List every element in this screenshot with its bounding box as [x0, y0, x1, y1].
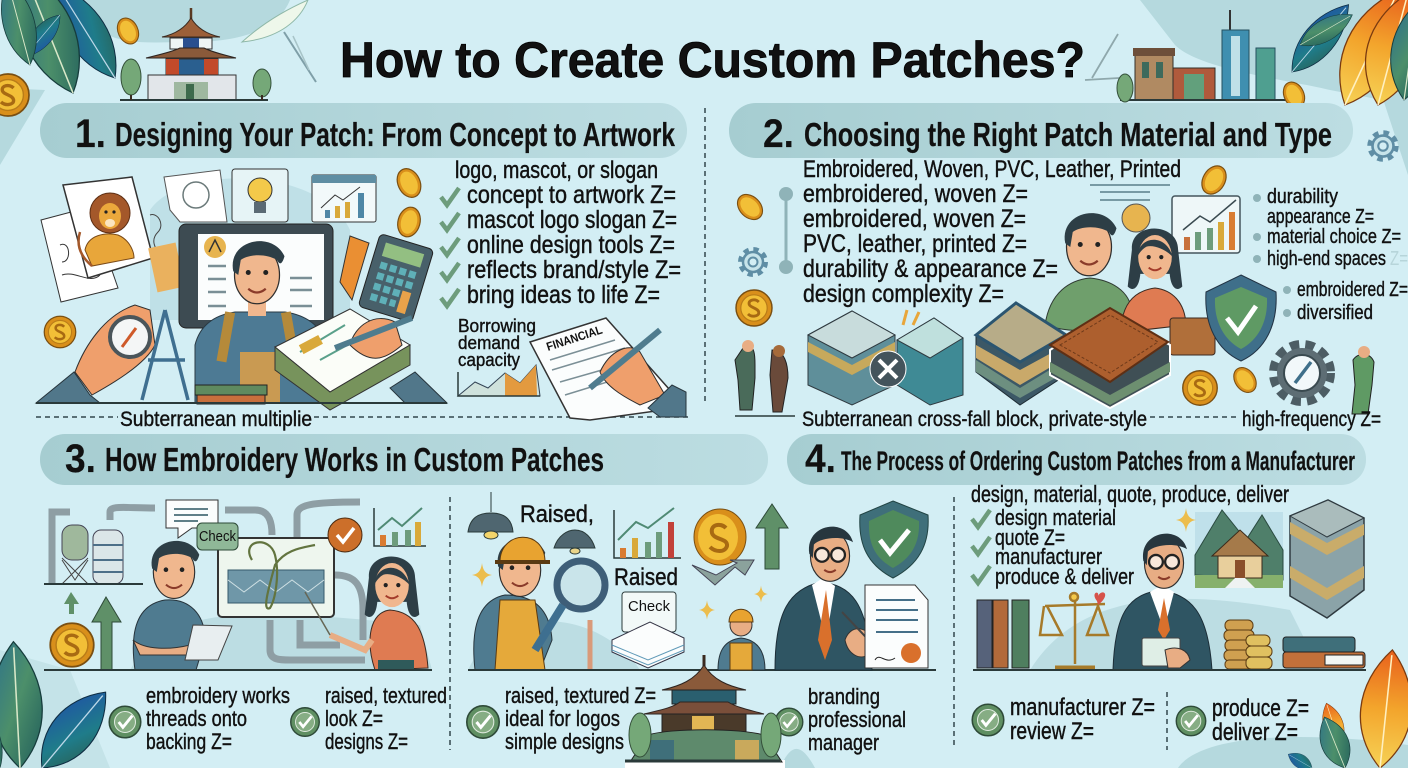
heading pill 4: 4.	[805, 437, 836, 481]
panel 4: captions: deliver Z=	[1212, 719, 1298, 746]
panel 3: captions right: branding	[808, 684, 880, 709]
decorative corner: top-left leaves	[0, 0, 316, 116]
panel 1: financial note	[458, 316, 686, 420]
heading pill 2: 2.	[763, 112, 794, 156]
panel 1: checklist: bring ideas to life Z=	[467, 281, 660, 309]
icon: divider tool	[142, 310, 188, 400]
icon: shield	[1206, 275, 1276, 361]
panel 1: financial note: capacity	[458, 350, 520, 370]
panel 3: captions right	[775, 684, 906, 755]
panel 2: side icons	[730, 133, 1396, 326]
panel 4: checklist: design material	[995, 505, 1116, 530]
panel 2: material list: embroidered, woven Z=	[803, 180, 1028, 208]
person: man with tablet	[133, 541, 232, 670]
heading pill 4	[787, 434, 1366, 485]
panel 3: captions left: look Z=	[325, 706, 383, 731]
panel 4: checklist: produce & deliver	[995, 564, 1134, 589]
icon: green arrows and coin	[50, 592, 121, 670]
panel 2: material list	[779, 156, 1181, 308]
icon: sparkle	[1176, 508, 1196, 532]
panel 2: bottom figures	[735, 340, 1374, 416]
panel 3: captions right: manager	[808, 730, 879, 755]
icon: chart window	[312, 175, 376, 222]
icon: city skyline top right	[1085, 10, 1290, 102]
panel 2: side bullet list: durability	[1267, 186, 1338, 208]
icon: speech bubble	[166, 500, 218, 538]
heading pill 1: Designing Your Patch: From Concept to Artwork	[115, 116, 675, 153]
panel 3: captions middle: raised, textured Z=	[505, 683, 656, 708]
check bubble: Check	[199, 528, 236, 545]
panel 2: footer labels: high-frequency Z=	[1242, 408, 1381, 431]
panel 1: financial note: demand	[458, 333, 520, 353]
icon: books upright	[977, 600, 1029, 668]
panel 1: checklist: online design tools Z=	[467, 231, 675, 259]
icon: lamps	[468, 492, 595, 554]
panel 3: captions left: embroidery works	[146, 683, 290, 708]
panel 3: captions left	[109, 683, 447, 754]
panel 1: footer label: Subterranean multiplie	[120, 408, 312, 431]
icon: column chart	[614, 508, 681, 558]
panel 1: checklist	[441, 157, 681, 309]
panel 3: inspector illustration: Raised	[614, 564, 678, 591]
icon: cross badge	[870, 351, 906, 387]
check bubble	[197, 523, 238, 550]
person: manager	[1113, 534, 1212, 670]
heading pill 1	[40, 103, 687, 158]
panel 2: side bullet list: appearance Z=	[1267, 206, 1374, 228]
icon: hand with compass	[36, 305, 155, 403]
person: woman pointer	[305, 556, 428, 670]
panel 2: material list: embroidered, woven Z=	[803, 205, 1026, 233]
panel 1: checklist: mascot logo slogan Z=	[467, 206, 677, 234]
icon: book stack with hand	[195, 309, 447, 410]
decorative corner: bottom-left leaves	[0, 640, 122, 768]
heading pill 1: 1.	[75, 112, 106, 156]
panel 3: embroidery illustration	[44, 500, 432, 670]
icon: lion drawing	[63, 177, 153, 278]
panel 4: checklist	[971, 481, 1289, 589]
panel 1: checklist: reflects brand/style Z=	[467, 256, 681, 284]
person: small worker	[718, 609, 765, 670]
icon: fabric board	[218, 538, 334, 617]
decorative corner: bottom-right leaves	[1285, 647, 1408, 768]
panel 1: checklist: logo, mascot, or slogan	[455, 157, 658, 184]
heading pill 2	[729, 103, 1353, 158]
panel 3: captions left: designs Z=	[325, 729, 408, 754]
title: How to Create Custom Patches?	[340, 32, 1085, 88]
icon: tanks	[44, 525, 143, 584]
panel 3: captions left: threads onto	[146, 706, 247, 731]
icon: house card	[1195, 510, 1283, 588]
panel 4: manager scene	[973, 534, 1366, 670]
icon: orange tick badge	[328, 518, 362, 552]
panel 3: captions right: professional	[808, 707, 906, 732]
icon: light bulb card	[232, 169, 288, 222]
panel 2: side bullet list: diversified	[1297, 302, 1373, 324]
icon: pagoda top	[120, 8, 271, 100]
decorative corner: top-right leaves	[1279, 0, 1408, 116]
icon: block cube	[1290, 500, 1364, 618]
panel 2: footer labels: Subterranean cross-fall block, private-style	[802, 408, 1147, 431]
icon: tablet with designer	[179, 224, 333, 403]
panel 3: captions left: backing Z=	[146, 729, 232, 754]
check card and papers	[612, 592, 684, 668]
check card and papers: Check	[628, 598, 670, 615]
heading pill 3	[40, 434, 768, 485]
heading pill 3: How Embroidery Works in Custom Patches	[105, 441, 604, 478]
icon: coin stacks	[1224, 620, 1272, 669]
panel 4: captions	[972, 694, 1309, 746]
panel 3: captions middle: simple designs	[505, 729, 624, 754]
icon: stacked books	[1283, 637, 1365, 668]
icon: pencil	[340, 236, 369, 300]
panel 2: material list: Embroidered, Woven, PVC, Leather, Printed	[803, 156, 1181, 183]
person: worker with magnifier	[474, 537, 605, 670]
panel 4: checklist: design, material, quote, produce, deliver	[971, 481, 1289, 507]
icon: sparkle	[472, 563, 492, 587]
panel 1: financial note: FINANCIAL	[545, 323, 604, 354]
heading pill 3: 3.	[65, 437, 96, 481]
panel 2: footer labels	[802, 408, 1381, 431]
panel 1: checklist: concept to artwork Z=	[467, 181, 676, 209]
panel 2: material list: durability & appearance Z=	[803, 255, 1058, 283]
panel 4: captions: produce Z=	[1212, 695, 1309, 722]
panel 3: coin and growth	[692, 504, 788, 620]
panel 3: captions left: raised, textured	[325, 683, 447, 708]
panel 4: checklist: quote Z=	[995, 525, 1065, 550]
panel 4: checklist: manufacturer	[995, 544, 1102, 569]
panel 1: illustration	[36, 165, 447, 410]
panel 2: couple with chart	[1045, 185, 1240, 355]
panel 2: side bullet list	[1253, 186, 1408, 324]
panel 4: captions: manufacturer Z=	[1010, 694, 1155, 721]
panel 2: material blocks	[808, 303, 1170, 408]
panel 3: inspector illustration: Raised,	[520, 501, 594, 528]
panel 2: material list: PVC, leather, printed Z=	[803, 230, 1027, 258]
panel 3: captions middle	[467, 683, 656, 754]
icon: gauge gear	[1274, 345, 1330, 401]
icon: pagoda bottom	[625, 655, 785, 768]
panel 3: captions middle: ideal for logos	[505, 706, 620, 731]
panel 2: material list: design complexity Z=	[803, 280, 1004, 308]
panel 1: financial note: Borrowing	[458, 316, 536, 336]
icon: calculator	[358, 233, 434, 323]
icon: pipes	[52, 502, 365, 660]
icon: certificate with shield	[860, 501, 928, 668]
panel 3: inspector illustration	[468, 492, 936, 670]
icon: small chart	[374, 508, 426, 546]
panel 4: captions: review Z=	[1010, 718, 1094, 745]
icon: scales	[1040, 593, 1108, 668]
person: businessman signing	[775, 527, 880, 670]
